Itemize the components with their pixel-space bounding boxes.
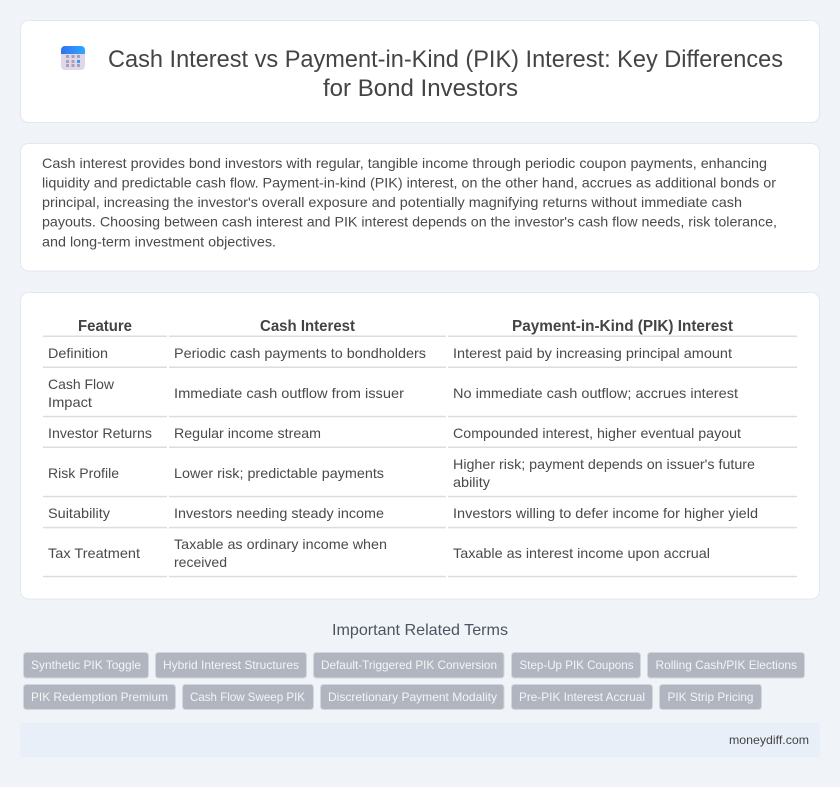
row: tax treatment: Tax Treatment [48,545,140,561]
row: tax treatment: received [174,554,227,570]
tags: related terms: Synthetic PIK Toggle [31,658,141,672]
tags: related terms: PIK Redemption Premium [31,690,168,704]
row: risk profile: Risk Profile [48,465,119,481]
tags: related terms: Rolling Cash/PIK Elections [656,658,797,672]
tags: related terms: Discretionary Payment Modality [328,690,497,704]
row: definition: Definition [48,345,108,361]
table header row: Cash Interest [260,318,356,335]
footer [20,723,820,757]
panel: introduction paragraph: and long-term investment objectives. [42,233,276,249]
table header row [78,318,734,335]
row: tax treatment: Taxable as interest income upon accrual [453,545,710,561]
tags: related terms: Hybrid Interest Structures [163,658,299,672]
row: risk profile: Lower risk; predictable payments [174,465,384,481]
icon: calendar [61,46,85,70]
row: risk profile: Higher risk; payment depends on issuer's future [453,456,755,472]
panel: introduction paragraph: liquidity and predictable cash flow. Payment-in-kind (PIK) interest, on the other hand, accrues as additional bonds or [42,174,776,190]
footer: moneydiff.com [729,733,809,747]
tags: related terms: Default-Triggered PIK Conversion [321,658,497,672]
tags: related terms [24,652,804,710]
title: Cash Interest vs Payment-in-Kind (PIK) Interest: Key Differences [108,46,783,73]
tags: related terms: Pre-PIK Interest Accrual [519,690,645,704]
row: cash flow impact: No immediate cash outflow; accrues interest [453,385,738,401]
panel: introduction paragraph: payouts. Choosing between cash interest and PIK interest depends on the investor's cash flow needs, risk tolerance, [42,214,777,230]
row: risk profile: ability [453,474,490,490]
row: cash flow impact: Cash Flow [48,376,115,392]
row: cash flow impact [48,376,738,410]
tags: related terms: Step-Up PIK Coupons [520,658,634,672]
row: tax treatment [48,536,710,570]
panel: comparison table [20,292,820,599]
tags: related terms: PIK Strip Pricing [668,690,754,704]
row: investor returns [48,425,741,441]
row: suitability [48,505,758,521]
row: suitability: Investors willing to defer income for higher yield [453,505,758,521]
row: investor returns: Regular income stream [174,425,321,441]
table header row: Payment-in-Kind (PIK) Interest [512,318,734,335]
heading: important related terms: Important Related Terms [332,622,508,639]
row: definition [48,345,732,361]
title [108,46,783,102]
panel: header [20,20,820,122]
row: tax treatment: Taxable as ordinary income when [174,536,387,552]
panel: introduction paragraph: principal, increasing the investor's overall exposure and potentially magnifying returns without immediate cash [42,194,742,210]
row: risk profile [48,456,755,490]
panel: introduction paragraph [20,144,820,271]
tags: related terms: Cash Flow Sweep PIK [190,690,305,704]
panel: introduction paragraph: Cash interest provides bond investors with regular, tangible income through periodic coupon payments, enhancing [42,155,767,171]
title: for Bond Investors [323,75,518,102]
row: investor returns: Investor Returns [48,425,152,441]
row: cash flow impact: Impact [48,394,92,410]
row: definition: Periodic cash payments to bondholders [174,345,426,361]
row: cash flow impact: Immediate cash outflow from issuer [174,385,404,401]
row: suitability: Suitability [48,505,110,521]
table header row: Feature [78,318,132,335]
row: suitability: Investors needing steady income [174,505,384,521]
row: definition: Interest paid by increasing principal amount [453,345,732,361]
row: investor returns: Compounded interest, higher eventual payout [453,425,741,441]
